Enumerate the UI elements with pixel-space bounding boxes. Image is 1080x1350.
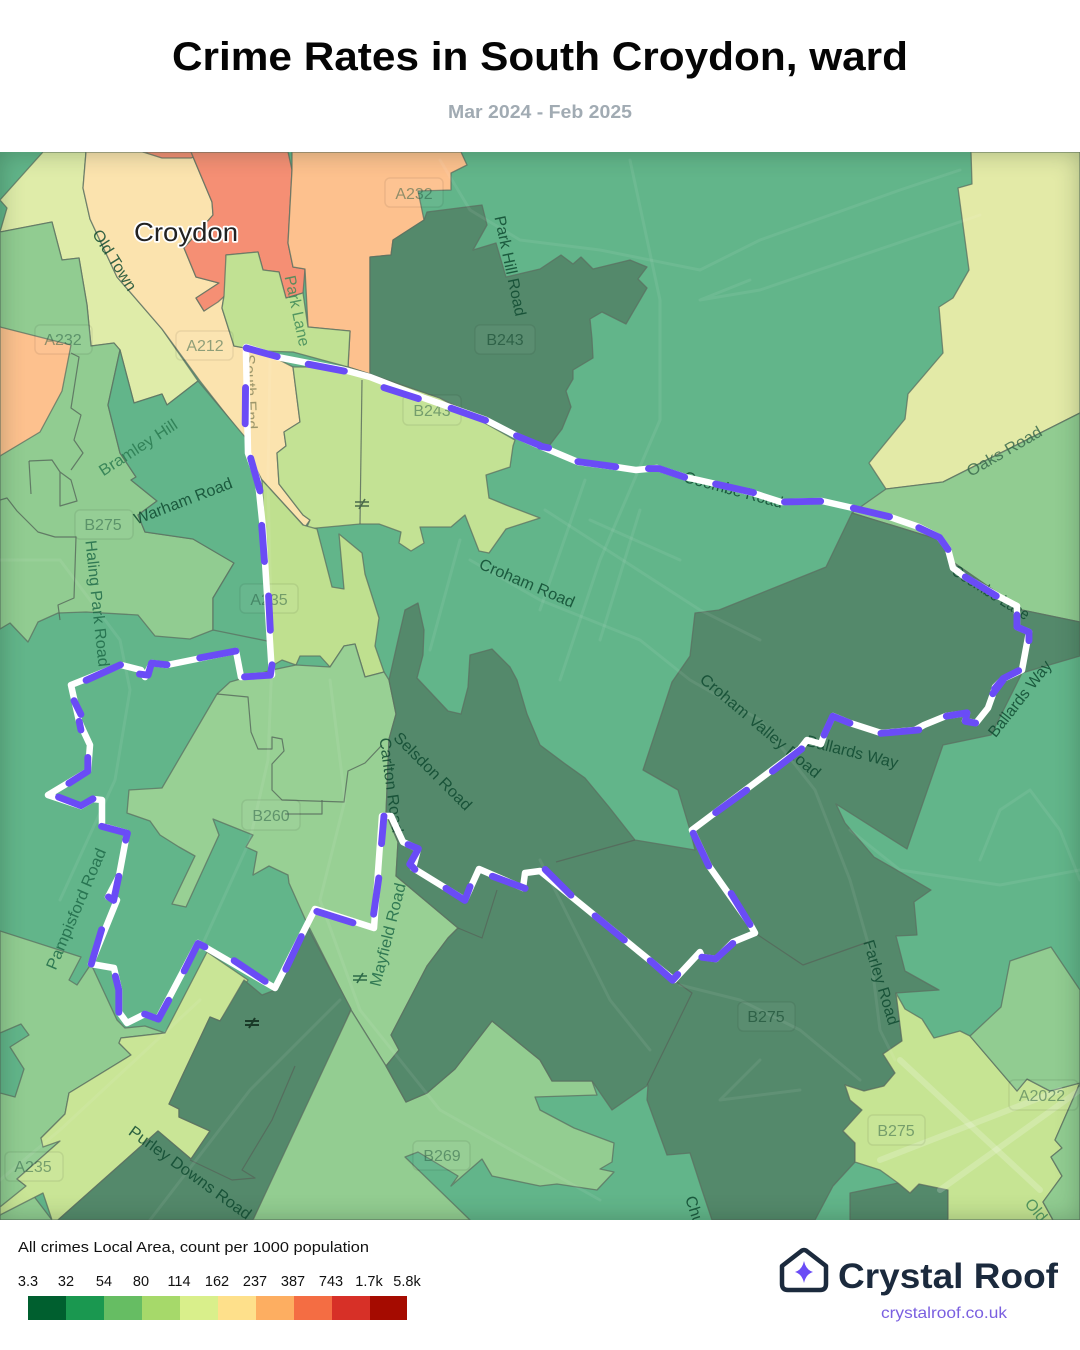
road labels: Farley Road bbox=[859, 938, 901, 1027]
title: Crime Rates in South Croydon, ward bbox=[172, 35, 908, 79]
legend scale labels: 743 bbox=[319, 1274, 343, 1290]
legend scale labels: 54 bbox=[96, 1274, 112, 1290]
legend colour bar bbox=[28, 1296, 407, 1320]
road number shields: B243 bbox=[413, 403, 451, 420]
road labels: Haling Park Road bbox=[81, 539, 112, 668]
road number shields: A2022 bbox=[1019, 1088, 1065, 1105]
legend scale labels: 32 bbox=[58, 1274, 74, 1290]
road number shields: B275 bbox=[877, 1123, 915, 1140]
road number shields: A232 bbox=[395, 186, 433, 203]
road number shields: A212 bbox=[186, 338, 224, 355]
road number shields: B275 bbox=[747, 1009, 785, 1026]
road labels: Old Town bbox=[88, 227, 139, 294]
road labels: South End bbox=[240, 354, 259, 430]
road labels: Selsdon Road bbox=[390, 729, 475, 814]
icon: Crystal Roof house logo bbox=[782, 1250, 826, 1290]
road labels: Coombe Lane bbox=[949, 563, 1032, 624]
road number shields: B275 bbox=[84, 517, 122, 534]
legend scale labels: 114 bbox=[167, 1274, 191, 1290]
road labels: Pampisford Road bbox=[44, 846, 110, 972]
road labels: Park Lane bbox=[281, 274, 312, 348]
logo wordmark: Crystal Roof bbox=[838, 1257, 1058, 1296]
road labels: Ballards Way bbox=[804, 733, 900, 772]
road number shields: B269 bbox=[423, 1148, 461, 1165]
internal ward boundaries bbox=[0, 353, 868, 1180]
website link: crystalroof.co.uk bbox=[881, 1305, 1008, 1322]
road number shields: A235 bbox=[14, 1159, 52, 1176]
legend scale labels: 1.7k bbox=[355, 1274, 383, 1290]
road number shields: B243 bbox=[486, 332, 524, 349]
road number shields bbox=[5, 178, 1078, 1181]
icon: railway stations bbox=[245, 499, 369, 1028]
road number shields: A235 bbox=[250, 592, 288, 609]
road labels: Croham Valley Road bbox=[696, 671, 824, 782]
ward boundary route bbox=[48, 347, 1029, 1023]
road labels: Coombe Road bbox=[682, 469, 785, 512]
road labels: Croham Road bbox=[476, 556, 577, 612]
road number shields: A232 bbox=[44, 332, 82, 349]
road labels: Bramley Hill bbox=[96, 417, 181, 480]
legend title: All crimes Local Area, count per 1000 population bbox=[18, 1240, 369, 1256]
road labels: Warham Road bbox=[132, 475, 235, 528]
legend scale labels: 237 bbox=[243, 1274, 267, 1290]
legend scale labels: 80 bbox=[133, 1274, 149, 1290]
legend scale labels bbox=[18, 1274, 421, 1290]
legend scale labels: 387 bbox=[281, 1274, 305, 1290]
road labels: Church Way bbox=[681, 1194, 724, 1282]
road labels bbox=[44, 214, 1080, 1282]
road labels: Mayfield Road bbox=[368, 881, 410, 988]
road labels: Purley Downs Road bbox=[125, 1123, 254, 1223]
subtitle: date range: Mar 2024 - Feb 2025 bbox=[448, 102, 632, 122]
road labels: Park Hill Road bbox=[490, 214, 528, 318]
map edge shading bbox=[0, 152, 1080, 1220]
road labels: Ballards Way bbox=[985, 658, 1055, 741]
road number shields: B260 bbox=[252, 808, 290, 825]
street network bbox=[0, 160, 1080, 1220]
road labels: Carlton Road bbox=[375, 737, 406, 834]
legend scale labels: 3.3 bbox=[18, 1274, 38, 1290]
place label: Croydon: Croydon bbox=[134, 217, 238, 247]
legend scale labels: 162 bbox=[205, 1274, 229, 1290]
choropleth areas bbox=[0, 152, 1080, 1220]
legend scale labels: 5.8k bbox=[393, 1274, 421, 1290]
road labels: Oaks Road bbox=[964, 424, 1045, 480]
